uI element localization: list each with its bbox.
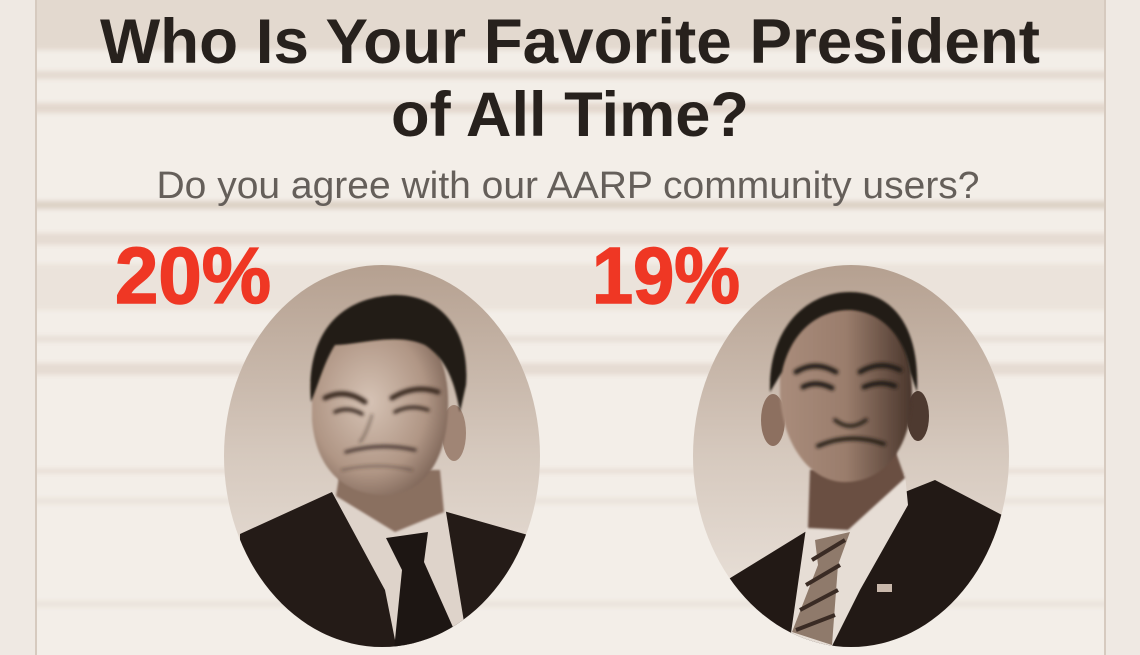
subtitle: Do you agree with our AARP community users? — [156, 165, 980, 207]
right suit — [727, 480, 1002, 655]
portrait: left president — [224, 265, 540, 655]
left percentage: 20% — [115, 231, 271, 320]
right ears — [761, 394, 785, 446]
left collar — [332, 492, 464, 650]
left ear — [442, 405, 466, 461]
right hair — [770, 292, 917, 392]
right pin — [877, 584, 892, 592]
left neck — [336, 470, 444, 532]
left features — [325, 389, 438, 470]
title — [100, 7, 1040, 150]
title: Who Is Your Favorite President — [100, 7, 1040, 77]
right neck — [808, 450, 905, 530]
portrait: right president — [693, 265, 1009, 655]
left face — [312, 325, 448, 495]
left suit — [240, 492, 528, 655]
right face — [780, 305, 912, 482]
title: of All Time? — [391, 80, 749, 150]
right features — [796, 365, 900, 446]
right percentage: 19% — [592, 231, 740, 320]
left tie — [386, 532, 456, 652]
right tie — [792, 532, 850, 645]
left hair — [310, 295, 466, 412]
right tie stripes — [796, 540, 845, 630]
right shirt — [790, 474, 908, 650]
